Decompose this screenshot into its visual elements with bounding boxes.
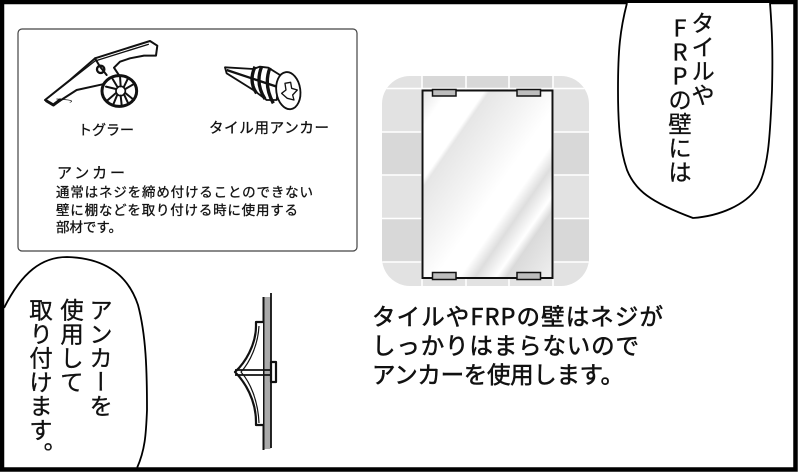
main caption: アンカーを使用します。 bbox=[372, 356, 624, 390]
illustration: mirror on tile wall bbox=[382, 76, 589, 286]
label: toggle: トグラー bbox=[78, 120, 134, 140]
icon: tile anchor bbox=[225, 67, 303, 111]
main caption bbox=[372, 298, 663, 390]
diagram: anchor in wall bbox=[235, 293, 276, 450]
bubble text: tile or: タイルや bbox=[686, 11, 720, 107]
text block: anchor description: 壁に棚などを取り付ける時に使用する bbox=[56, 199, 298, 219]
tile background bbox=[382, 76, 589, 286]
heading: anchor: アンカー bbox=[57, 162, 125, 183]
label: tile anchor: タイル用アンカー bbox=[209, 117, 329, 138]
panel: anchor types bbox=[18, 29, 357, 251]
text block: anchor description bbox=[56, 181, 313, 236]
speech bubble: top right bbox=[618, 3, 772, 218]
bubble text: use anchor: アンカーを bbox=[84, 298, 118, 418]
clips bbox=[432, 90, 540, 280]
main caption: タイルやFRPの壁はネジが bbox=[372, 298, 663, 332]
bubble text: use: 使用して bbox=[55, 298, 89, 394]
bubble text: attach: 取り付けます。 bbox=[24, 298, 58, 466]
text block: anchor description: 部材です。 bbox=[56, 216, 122, 236]
speech bubble: bottom left bbox=[4, 257, 147, 468]
bubble text: FRP wall: FRPの壁には bbox=[663, 16, 697, 184]
text block: anchor description: 通常はネジを締め付けることのできない bbox=[56, 181, 313, 201]
mirror bbox=[422, 90, 552, 278]
icon: toggle anchor bbox=[45, 41, 157, 106]
main caption: しっかりはまらないので bbox=[372, 327, 639, 361]
